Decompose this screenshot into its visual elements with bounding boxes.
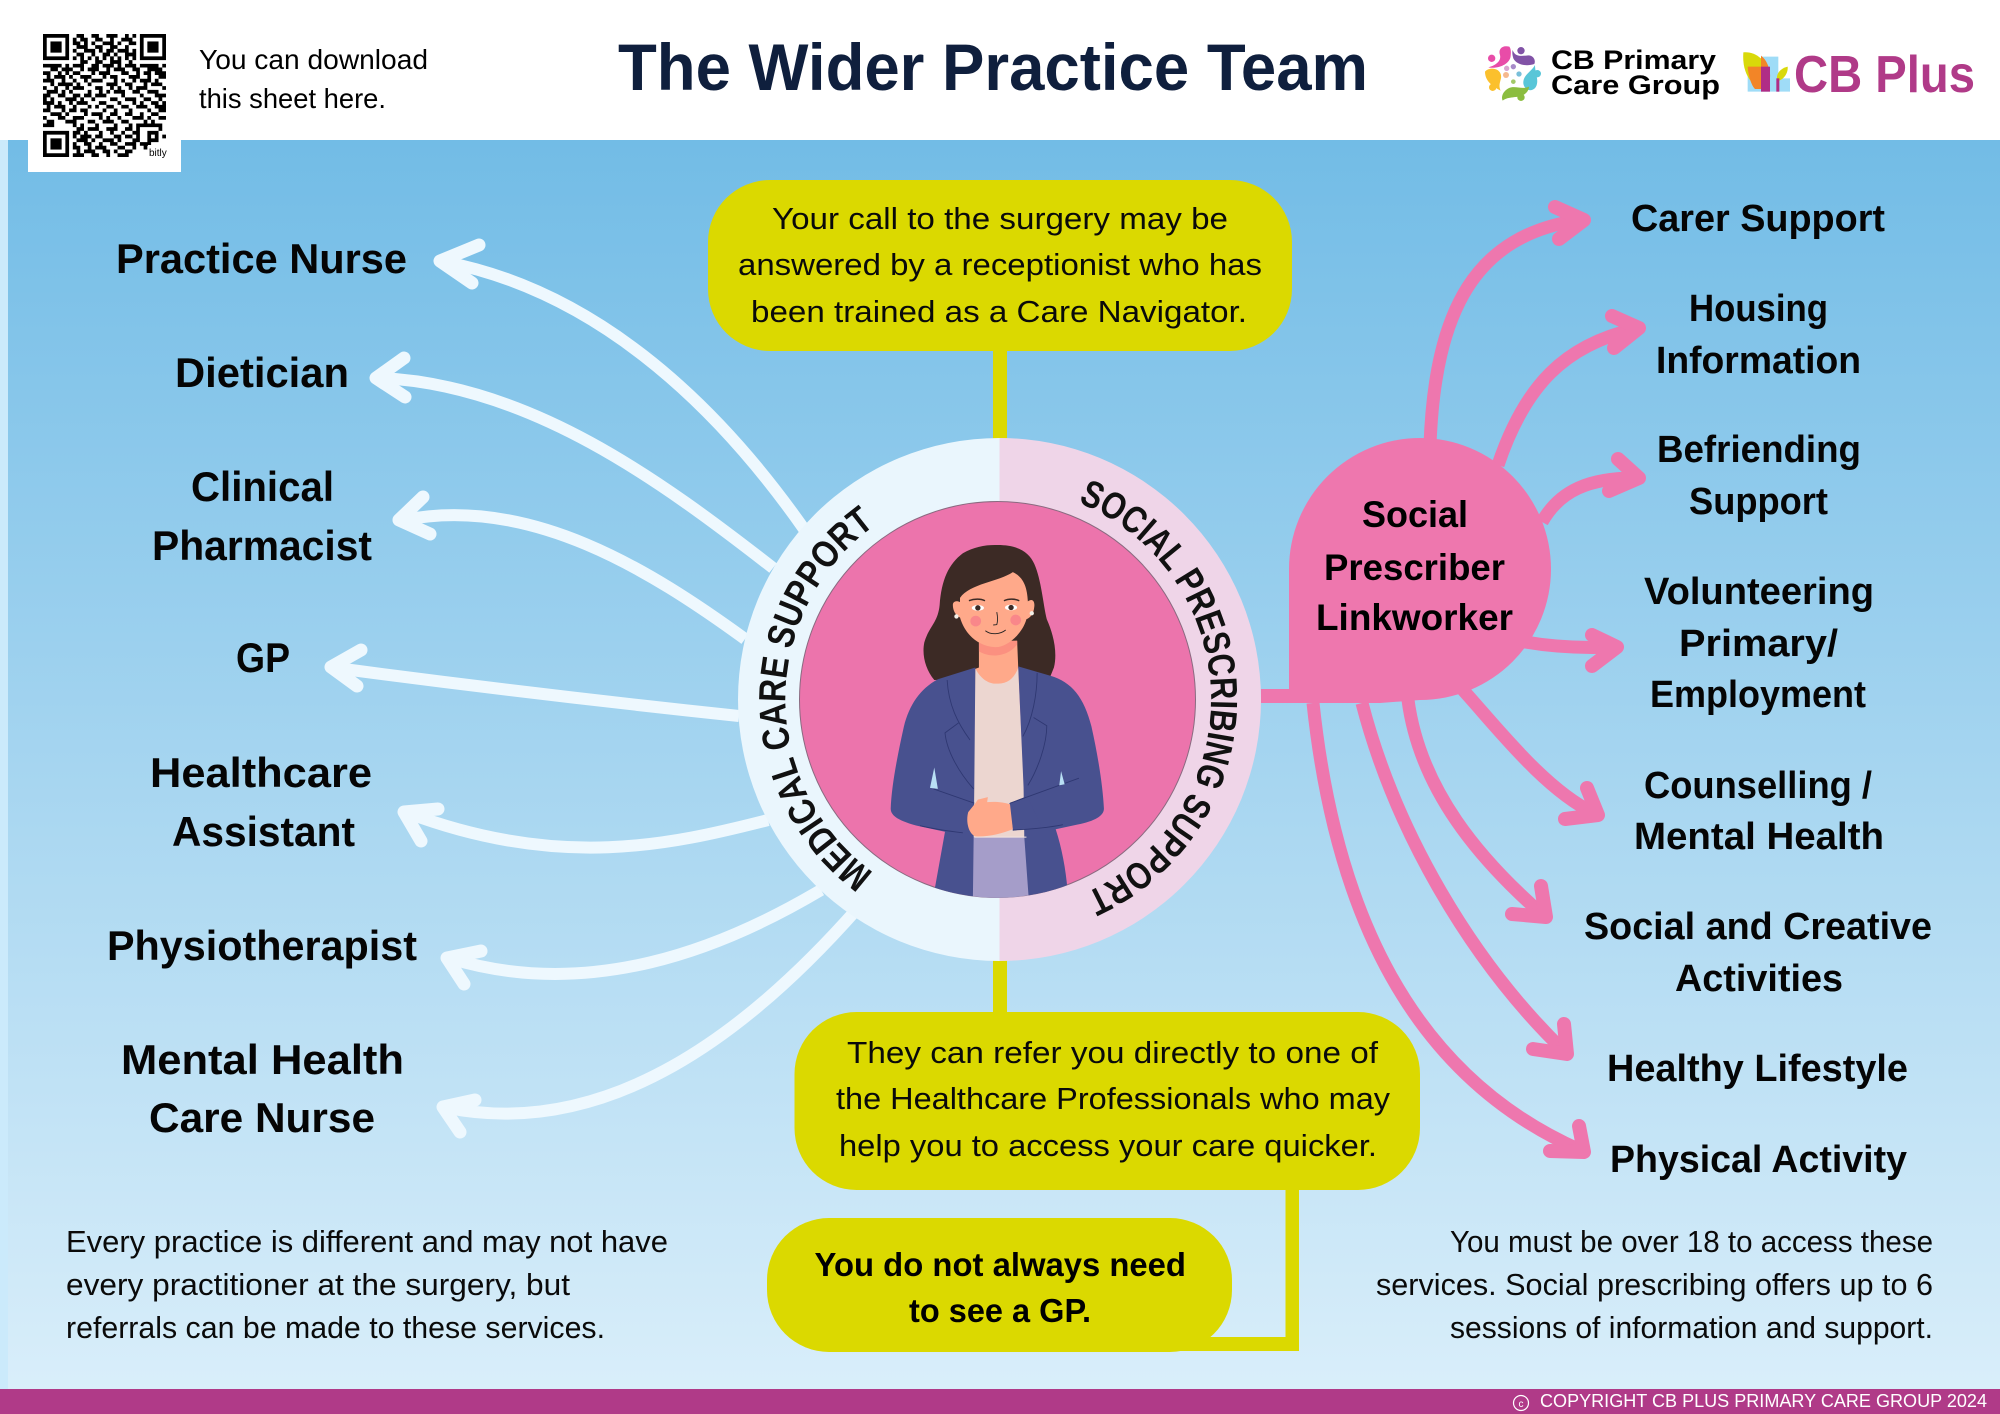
arrow: Healthy Lifestyle [1362, 703, 1567, 1054]
arrow: Practice Nurse [440, 245, 804, 529]
callout: direct referral [794, 1012, 1420, 1190]
illustration: woman in blue blazer [891, 545, 1104, 901]
label: Mental Health Care Nurse [121, 1036, 404, 1141]
bubble: social prescriber linkworker: Prescriber [1324, 547, 1505, 588]
callout: care navigator: answered by a receptionist who has [738, 247, 1262, 282]
arrow: Housing Information [1498, 316, 1639, 465]
label: Volunteering Primary/ Employment: Primary/ [1679, 623, 1838, 665]
arrow: Physiotherapist [447, 890, 821, 984]
label: Social and Creative Activities [1584, 906, 1932, 1000]
note: over 18: sessions of information and support. [1450, 1310, 1933, 1345]
note: over 18: services. Social prescribing offers up to 6 [1376, 1267, 1933, 1302]
label: Physiotherapist: Physiotherapist [107, 922, 417, 969]
logo: CB Plus: CB Plus [1794, 46, 1975, 104]
copyright text: COPYRIGHT CB PLUS PRIMARY CARE GROUP 2024 [1540, 1391, 1987, 1411]
download note: You can download [199, 44, 428, 75]
arrow: Social and Creative Activities [1408, 700, 1546, 917]
arrow: Clinical Pharmacist [399, 497, 745, 639]
central circle [738, 438, 1261, 961]
label: Clinical Pharmacist [152, 463, 372, 569]
ring right half [1000, 438, 1261, 961]
arrow: Carer Support [1430, 207, 1584, 445]
arrow: Physical Activity [1313, 703, 1584, 1152]
callout: you do not always need to see a GP: to see a GP. [909, 1292, 1091, 1329]
label: Carer Support: Carer Support [1631, 198, 1885, 240]
QR code panel: bitly [149, 148, 167, 159]
label: GP: GP [236, 634, 290, 681]
label: Counselling / Mental Health: Counselling / [1644, 765, 1872, 807]
callout: direct referral: the Healthcare Professionals who may [836, 1081, 1391, 1116]
bubble: social prescriber linkworker: Linkworker [1316, 597, 1513, 638]
label: Practice Nurse: Practice Nurse [116, 235, 407, 282]
arrow: GP [331, 650, 739, 716]
icon: flower [1485, 46, 1541, 101]
logo: CB Primary Care Group [1485, 45, 1720, 101]
labels: medical care services [107, 235, 417, 1141]
label: Mental Health Care Nurse: Mental Health [121, 1036, 404, 1083]
callout: you do not always need to see a GP: You do not always need [814, 1246, 1186, 1283]
arrow: Healthcare Assistant [404, 809, 768, 848]
label: Clinical Pharmacist: Pharmacist [152, 522, 372, 569]
label: Counselling / Mental Health [1634, 765, 1884, 858]
label: Social and Creative Activities: Social and Creative [1584, 906, 1932, 948]
label: Housing Information: Information [1656, 340, 1861, 382]
arrow: Dietician [376, 358, 773, 568]
label: Counselling / Mental Health: Mental Health [1634, 816, 1884, 858]
logo wordmark: CB Primary [1551, 45, 1716, 75]
label: Mental Health Care Nurse: Care Nurse [149, 1094, 375, 1141]
callout: direct referral: They can refer you directly to one of [847, 1035, 1378, 1070]
bubble: social prescriber linkworker: Social [1362, 494, 1468, 535]
ring left half [738, 438, 1000, 961]
logo wordmark [1551, 45, 1720, 100]
labels: social prescribing services [1584, 198, 1932, 1181]
note: every practice is different: every practitioner at the surgery, but [66, 1267, 570, 1302]
label: Physical Activity: Physical Activity [1610, 1139, 1907, 1181]
label: Housing Information [1656, 288, 1861, 382]
QR code panel [28, 0, 181, 172]
callout: care navigator: Your call to the surgery may be [772, 201, 1228, 236]
footer bar [0, 1389, 2000, 1414]
label: Befriending Support: Support [1689, 481, 1828, 523]
label: Volunteering Primary/ Employment: Volunteering [1644, 571, 1874, 613]
download note: this sheet here. [199, 83, 386, 114]
label: Housing Information: Housing [1689, 288, 1828, 330]
callout: direct referral: help you to access your care quicker. [839, 1128, 1377, 1163]
pink arrows: social prescribing [1313, 207, 1639, 1152]
label: Healthcare Assistant: Healthcare [150, 749, 372, 796]
label: Befriending Support: Befriending [1657, 429, 1861, 471]
label: Healthcare Assistant: Assistant [172, 808, 355, 855]
connector stems [993, 340, 1299, 1351]
white arrows: medical care support [331, 245, 857, 1132]
label: Dietician: Dietician [175, 349, 349, 396]
download note [199, 44, 428, 114]
note: every practice is different: referrals can be made to these services. [66, 1310, 605, 1345]
callout: care navigator: been trained as a Care Navigator. [751, 294, 1247, 329]
note: every practice is different [66, 1224, 668, 1345]
label: Befriending Support [1657, 429, 1861, 523]
label: Healthy Lifestyle: Healthy Lifestyle [1607, 1048, 1908, 1090]
label: Volunteering Primary/ Employment [1644, 571, 1874, 716]
label: Clinical Pharmacist: Clinical [191, 463, 334, 510]
icon: leaf and house [1743, 52, 1790, 92]
note: over 18 [1376, 1224, 1933, 1345]
note: every practice is different: Every practice is different and may not have [66, 1224, 668, 1259]
pink inner circle [800, 502, 1196, 898]
label: Volunteering Primary/ Employment: Employment [1650, 674, 1866, 716]
label: Social and Creative Activities: Activities [1675, 958, 1843, 1000]
logo wordmark: Care Group [1551, 70, 1720, 100]
arrow: Befriending Support [1542, 459, 1639, 522]
note: over 18: You must be over 18 to access these [1450, 1224, 1933, 1259]
copyright text: c [1518, 1399, 1524, 1410]
bubble: social prescriber linkworker [1261, 438, 1551, 703]
curved label: social prescribing support: SOCIAL PRESCRIBING SUPPORT [1081, 481, 1238, 916]
arrow: Mental Health Care Nurse [443, 909, 857, 1132]
callout: you do not always need to see a GP [767, 1218, 1232, 1352]
curved label: medical care support: MEDICAL CARE SUPPORT [759, 504, 872, 892]
label: Healthcare Assistant [150, 749, 372, 855]
arrow: Volunteering [1525, 635, 1617, 666]
arrow: Counselling [1463, 690, 1598, 819]
title: The Wider Practice Team [618, 30, 1368, 104]
callout: care navigator [708, 180, 1292, 351]
